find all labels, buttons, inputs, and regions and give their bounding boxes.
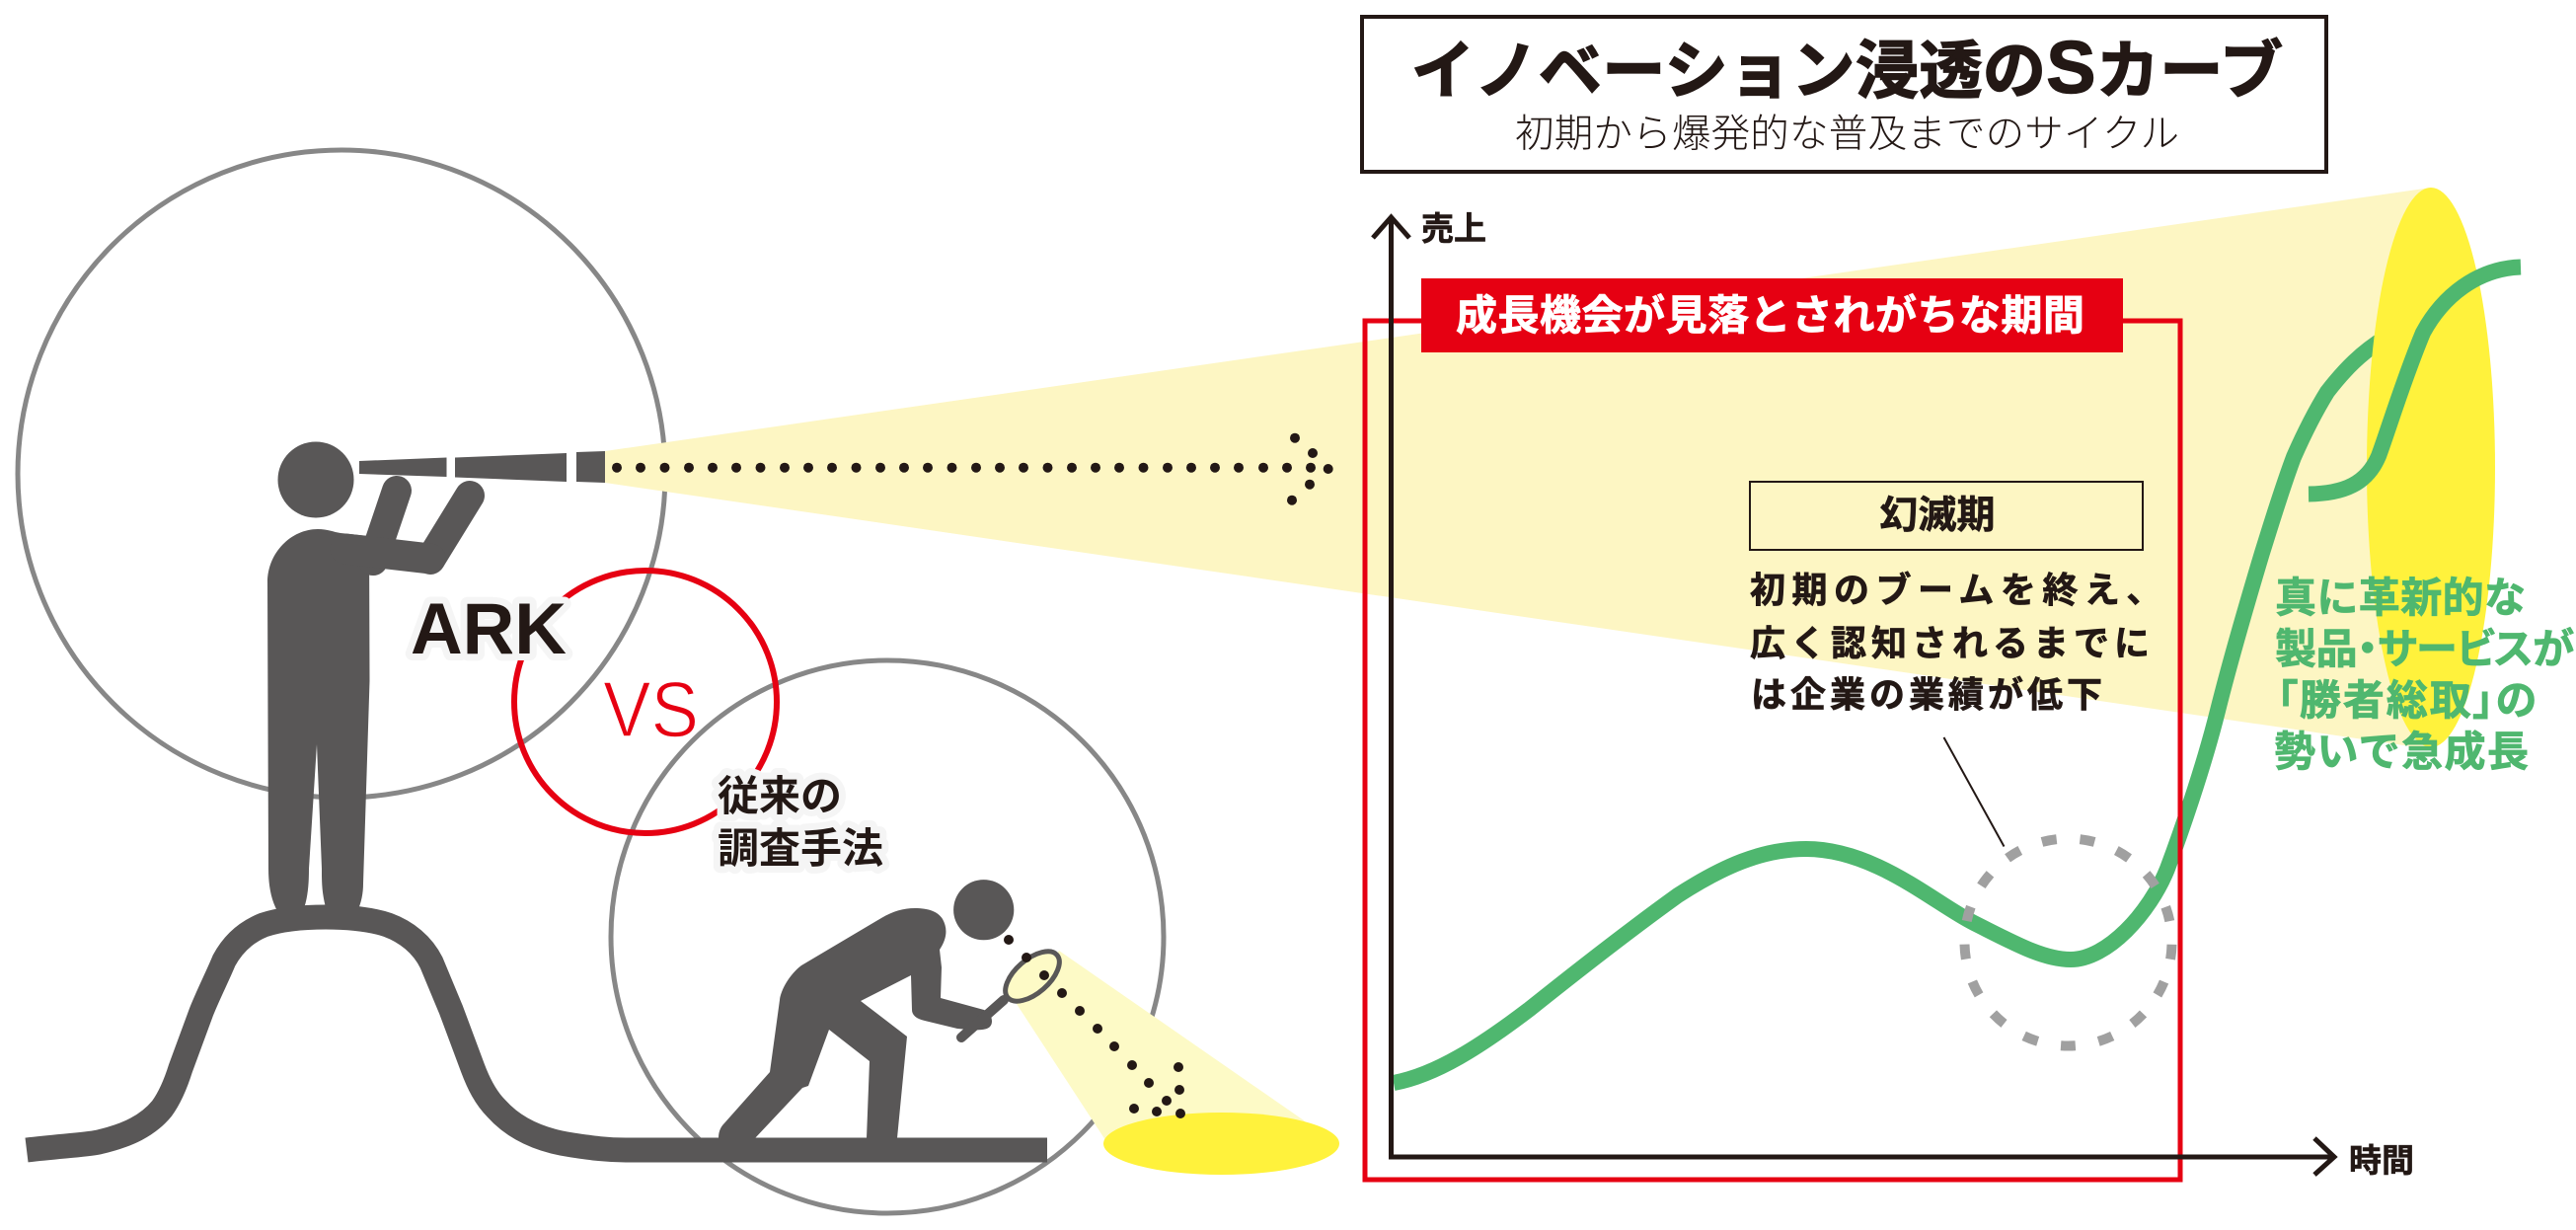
conventional research label: 従来の <box>718 773 842 819</box>
axis label: sales: 売上 <box>1421 210 1486 247</box>
ARK label: ARK <box>411 589 567 669</box>
green callout text: 真に革新的な <box>2275 575 2526 621</box>
conventional research label <box>718 773 883 872</box>
green S curve: main rise <box>1394 336 2388 1083</box>
red VS circle <box>514 571 777 833</box>
axis label: time: 時間 <box>2349 1142 2414 1179</box>
head <box>953 880 1014 940</box>
green callout text: 「勝者総取」の <box>2277 677 2537 724</box>
body <box>719 908 992 1138</box>
disillusionment explanation text <box>1750 570 2168 715</box>
disillusionment label box: 幻滅期 <box>1879 495 1996 537</box>
small gray circle: conventional research field of view <box>611 660 1164 1213</box>
disillusionment explanation text: 広く認知されるまでに <box>1750 623 2155 663</box>
person with telescope on hill <box>267 442 605 911</box>
ground with hill <box>27 917 1047 1150</box>
magnifier light beam <box>1017 951 1323 1143</box>
leader line to dashed circle <box>1944 737 2004 847</box>
telescope light beam <box>605 188 2431 749</box>
subtitle: 初期から爆発的な普及までのサイクル <box>1515 113 2179 156</box>
red label: overlooked period: 成長機会が見落とされがちな期間 <box>1456 292 2084 339</box>
yellow spotlight ellipse at far end of beam <box>2367 188 2495 747</box>
telescope sight dotted arrow <box>612 433 1333 505</box>
yellow spotlight on the ground <box>1103 1113 1339 1175</box>
magnifier lens <box>997 943 1068 1010</box>
body and legs <box>267 529 369 911</box>
disillusionment explanation text: 初期のブームを終え、 <box>1750 570 2168 610</box>
dashed circle: trough of disillusionment <box>1964 839 2171 1046</box>
green callout text <box>2274 575 2574 775</box>
magnifier sight dots <box>1004 935 1185 1118</box>
green callout text: 勢いで急成長 <box>2274 729 2529 775</box>
title: イノベーション浸透のSカーブ <box>1411 26 2283 109</box>
large gray circle: ARK field of view <box>18 150 665 798</box>
green callout text: 製品・サービスが <box>2275 626 2574 672</box>
green S curve: magnified section in spotlight <box>2309 267 2521 494</box>
red frame: overlooked period <box>1365 321 2180 1180</box>
red label: overlooked period <box>1421 278 2123 352</box>
magnifier handle <box>961 1000 1004 1038</box>
chart axes <box>1373 217 2334 1175</box>
title box <box>1362 17 2326 172</box>
head <box>278 442 353 517</box>
telescope <box>359 451 605 483</box>
disillusionment label box <box>1750 482 2143 550</box>
arms <box>345 491 470 561</box>
person with magnifying glass <box>719 880 1068 1138</box>
disillusionment explanation text: は企業の業績が低下 <box>1751 674 2106 715</box>
VS label: VS <box>603 665 699 753</box>
conventional research label: 調査手法 <box>718 825 883 872</box>
